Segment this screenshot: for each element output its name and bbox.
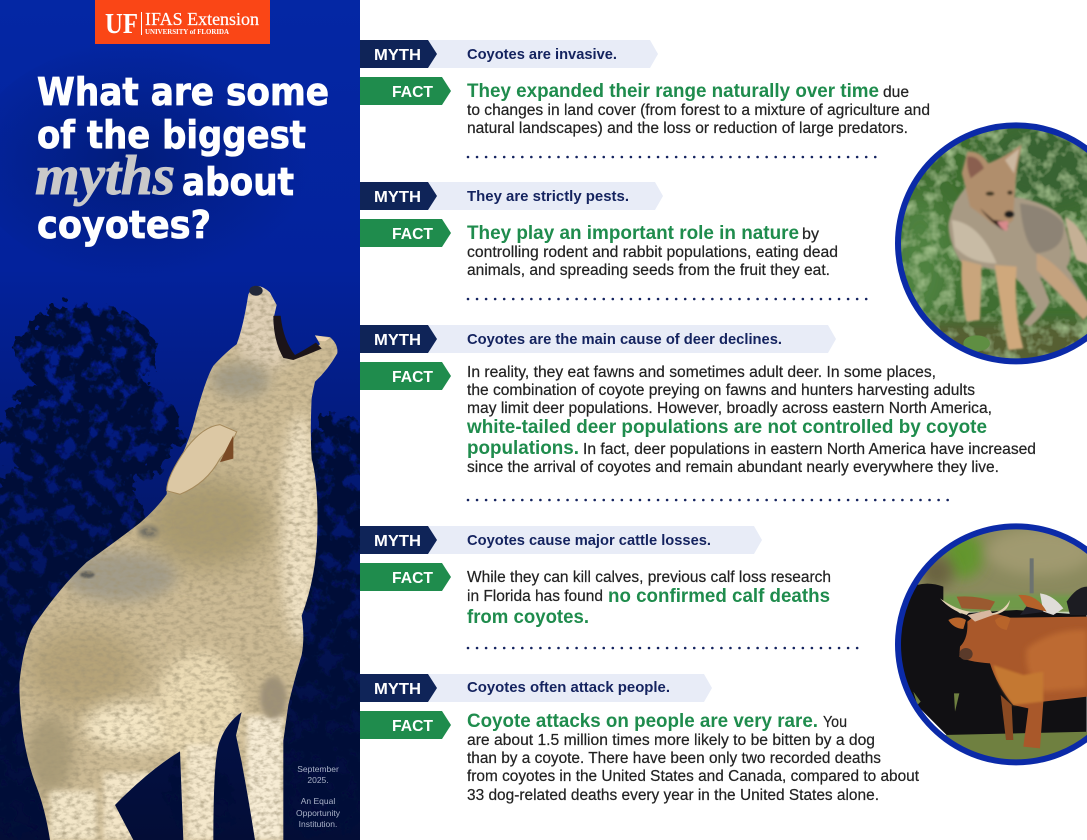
myth and fact 1 <box>360 40 930 137</box>
fact text <box>467 569 831 628</box>
footer note: Opportunity <box>296 808 341 818</box>
fact text: from coyotes in the United States and Canada, compared to about <box>467 768 920 785</box>
fact bar <box>360 362 451 390</box>
pup head and ears <box>962 144 1022 226</box>
fact text: While they can kill calves, previous calf loss research <box>467 569 831 586</box>
panel: blue left column <box>0 0 383 840</box>
fact bar <box>360 219 451 247</box>
pup body and legs <box>947 188 1087 327</box>
myth bar <box>360 526 762 554</box>
fact text: from coyotes. <box>467 606 589 628</box>
fact text: no confirmed calf deaths <box>608 585 830 607</box>
myth and fact 4 <box>360 526 831 628</box>
fact bar <box>360 563 451 591</box>
logo: UF IFAS Extension: IFAS Extension <box>145 9 259 29</box>
fact text: than by a coyote. There have been only two recorded deaths <box>467 750 881 767</box>
fact text: They expanded their range naturally over time <box>467 80 879 102</box>
myth bar: MYTH <box>374 47 421 64</box>
fact text: In reality, they eat fawns and sometimes adult deer. In some places, <box>467 364 936 381</box>
fact bar: FACT <box>392 718 434 735</box>
fact text <box>467 222 838 279</box>
myth bar: MYTH <box>374 533 421 550</box>
fact bar: FACT <box>392 226 434 243</box>
brown cow <box>959 612 1087 748</box>
black cattle <box>900 584 1087 738</box>
footer note: Institution. <box>299 819 337 829</box>
circle border <box>898 526 1087 762</box>
fact text: controlling rodent and rabbit populations, eating dead <box>467 244 838 261</box>
footer note: An Equal <box>301 796 335 806</box>
fact bar: FACT <box>392 570 434 587</box>
coyote ear <box>167 425 237 494</box>
myth bar: Coyotes cause major cattle losses. <box>467 532 711 549</box>
fact text: may limit deer populations. However, broadly across eastern North America, <box>467 400 992 417</box>
fact text: 33 dog-related deaths every year in the United States alone. <box>467 787 879 804</box>
myth and fact 3 <box>360 325 1036 476</box>
fact bar: FACT <box>392 84 434 101</box>
coyote mouth <box>273 316 322 360</box>
myth bar <box>360 182 663 210</box>
myth bar <box>360 40 658 68</box>
photo: coyote pup in circle <box>895 122 1087 364</box>
myth bar <box>360 325 836 353</box>
myth bar: MYTH <box>374 681 421 698</box>
title: of the biggest <box>37 113 306 157</box>
fact bar <box>360 711 451 739</box>
fact text: They play an important role in nature <box>467 222 799 244</box>
circle border <box>898 125 1087 361</box>
fact text: animals, and spreading seeds from the fruit they eat. <box>467 262 830 279</box>
photo: howling coyote <box>19 286 338 840</box>
myth bar: Coyotes are the main cause of deer declines. <box>467 331 782 348</box>
fence post <box>1030 558 1034 593</box>
trees silhouette <box>0 297 360 800</box>
pup tail <box>1065 217 1087 267</box>
myth bar: MYTH <box>374 332 421 349</box>
fact text: populations. <box>467 437 579 459</box>
fact text: white-tailed deer populations are not controlled by coyote <box>466 416 987 438</box>
fact bar <box>360 77 451 105</box>
footer note: September <box>297 764 339 774</box>
fact text: in Florida has found <box>467 588 603 605</box>
fact text: due <box>883 84 909 101</box>
logo: UF IFAS Extension <box>95 0 270 44</box>
myth bar: Coyotes often attack people. <box>467 679 670 696</box>
grass ground <box>945 732 1087 760</box>
title: coyotes? <box>37 203 211 247</box>
fact text: are about 1.5 million times more likely to be bitten by a dog <box>467 732 875 749</box>
title: What are some <box>37 70 329 114</box>
fact text <box>467 710 920 804</box>
coyote nose <box>249 286 263 296</box>
title <box>35 70 329 247</box>
myth and fact 2 <box>360 182 838 279</box>
fact text: to changes in land cover (from forest to a mixture of agriculture and <box>467 102 930 119</box>
title: myths <box>35 145 175 207</box>
fact text: the combination of coyote preying on fawns and hunters harvesting adults <box>467 382 975 399</box>
title: about <box>182 160 294 204</box>
myth bar: They are strictly pests. <box>467 188 629 205</box>
fact text: You <box>823 714 847 731</box>
footer note: 2025. <box>307 775 329 785</box>
gaps between black legs <box>913 692 959 712</box>
footer note <box>296 764 341 829</box>
foreground leaves <box>963 335 990 351</box>
myth bar: MYTH <box>374 189 421 206</box>
fact text: natural landscapes) and the loss or reduction of large predators. <box>467 120 908 137</box>
fact bar: FACT <box>392 369 434 386</box>
fact text <box>467 80 930 137</box>
fact text: since the arrival of coyotes and remain abundant nearly everywhere they live. <box>467 459 999 476</box>
myth bar: Coyotes are invasive. <box>467 46 617 63</box>
cow horns and ears <box>940 598 1010 615</box>
myth bar <box>360 674 712 702</box>
fact text: by <box>802 226 819 243</box>
fact text <box>466 364 1036 476</box>
myth and fact 5 <box>360 674 920 804</box>
logo: UF IFAS Extension: UNIVERSITY of FLORIDA <box>145 27 230 36</box>
photo: cattle in circle <box>895 523 1087 766</box>
logo: UF IFAS Extension: UF <box>105 8 138 40</box>
fact text: Coyote attacks on people are very rare. <box>467 710 818 732</box>
fact text: In fact, deer populations in eastern North America have increased <box>583 441 1036 458</box>
